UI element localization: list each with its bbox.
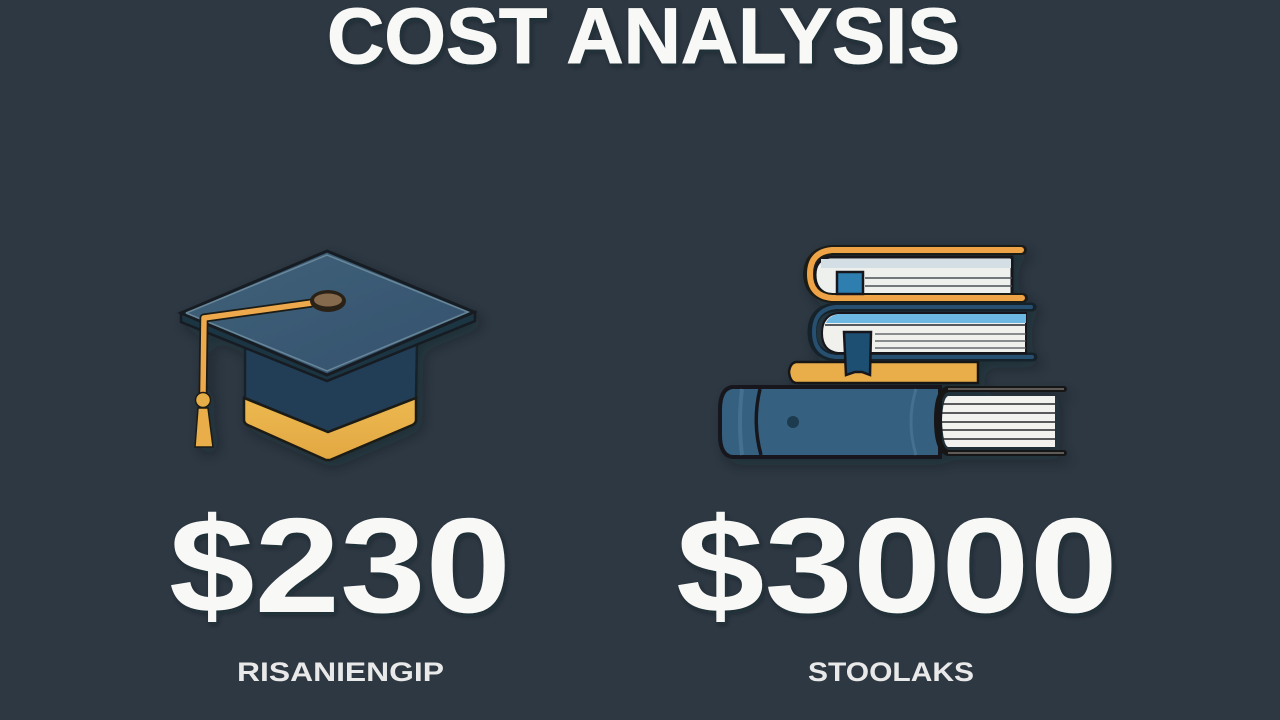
- cap gold band: [244, 398, 416, 460]
- tassel cord: [203, 303, 312, 393]
- mortarboard: [181, 251, 475, 381]
- icon: graduation cap: [181, 251, 475, 460]
- cap body: [245, 345, 417, 432]
- price: books: $3000: [676, 490, 1118, 641]
- bookmark ribbon: [844, 332, 871, 375]
- label: books: STOOLAKS: [808, 657, 974, 687]
- top orange book: [808, 250, 1023, 298]
- icon: stack of books: [720, 250, 1064, 457]
- second navy book: [812, 307, 1033, 357]
- bottom large blue book: [720, 387, 1064, 457]
- price: tuition: $230: [169, 490, 511, 641]
- label: tuition: RISANIENGIP: [237, 657, 444, 687]
- gold book: [789, 362, 978, 383]
- cap button: [310, 290, 346, 312]
- tassel: [195, 392, 213, 447]
